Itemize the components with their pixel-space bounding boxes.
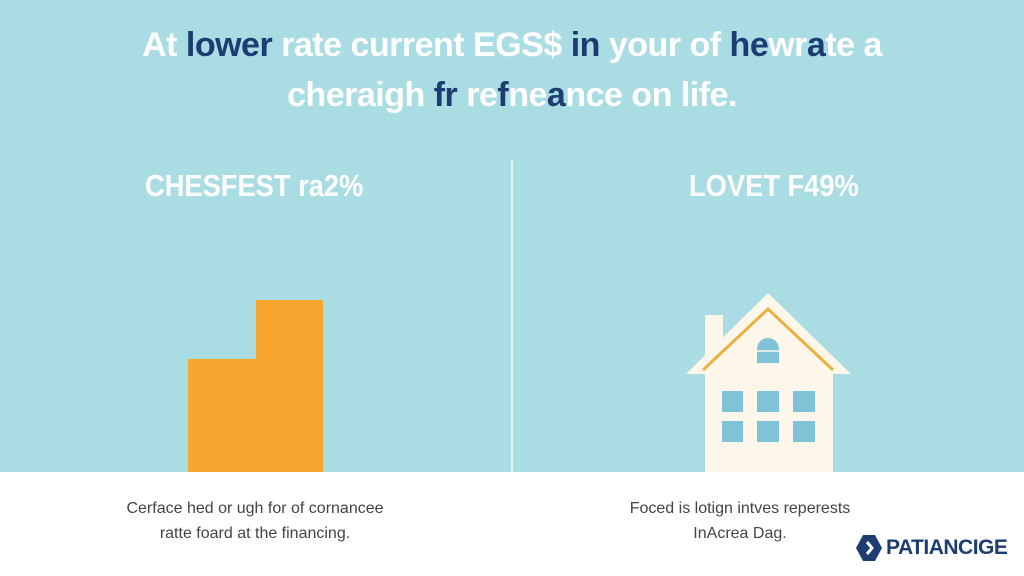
title (142, 26, 883, 114)
bar chart (188, 300, 323, 472)
caption: right (630, 500, 850, 542)
logo: PATIANCIGE (886, 536, 1007, 559)
caption: right: InAcrea Dag. (693, 525, 787, 542)
divider (511, 160, 513, 472)
heading: left: CHESFEST ra2% (145, 168, 363, 203)
caption: left (126, 500, 384, 542)
title: At lower rate current EGS$ in your of hewrate a (142, 26, 882, 64)
caption: right: Foced is lotign intves reperests (630, 500, 850, 517)
caption: left: ratte foard at the financing. (160, 525, 350, 542)
icon: house (686, 293, 851, 472)
caption: left: Cerface hed or ugh for of cornancee (126, 500, 384, 517)
heading: right: LOVET F49% (689, 168, 859, 203)
title: cheraigh fr refneance on life. (287, 76, 737, 114)
